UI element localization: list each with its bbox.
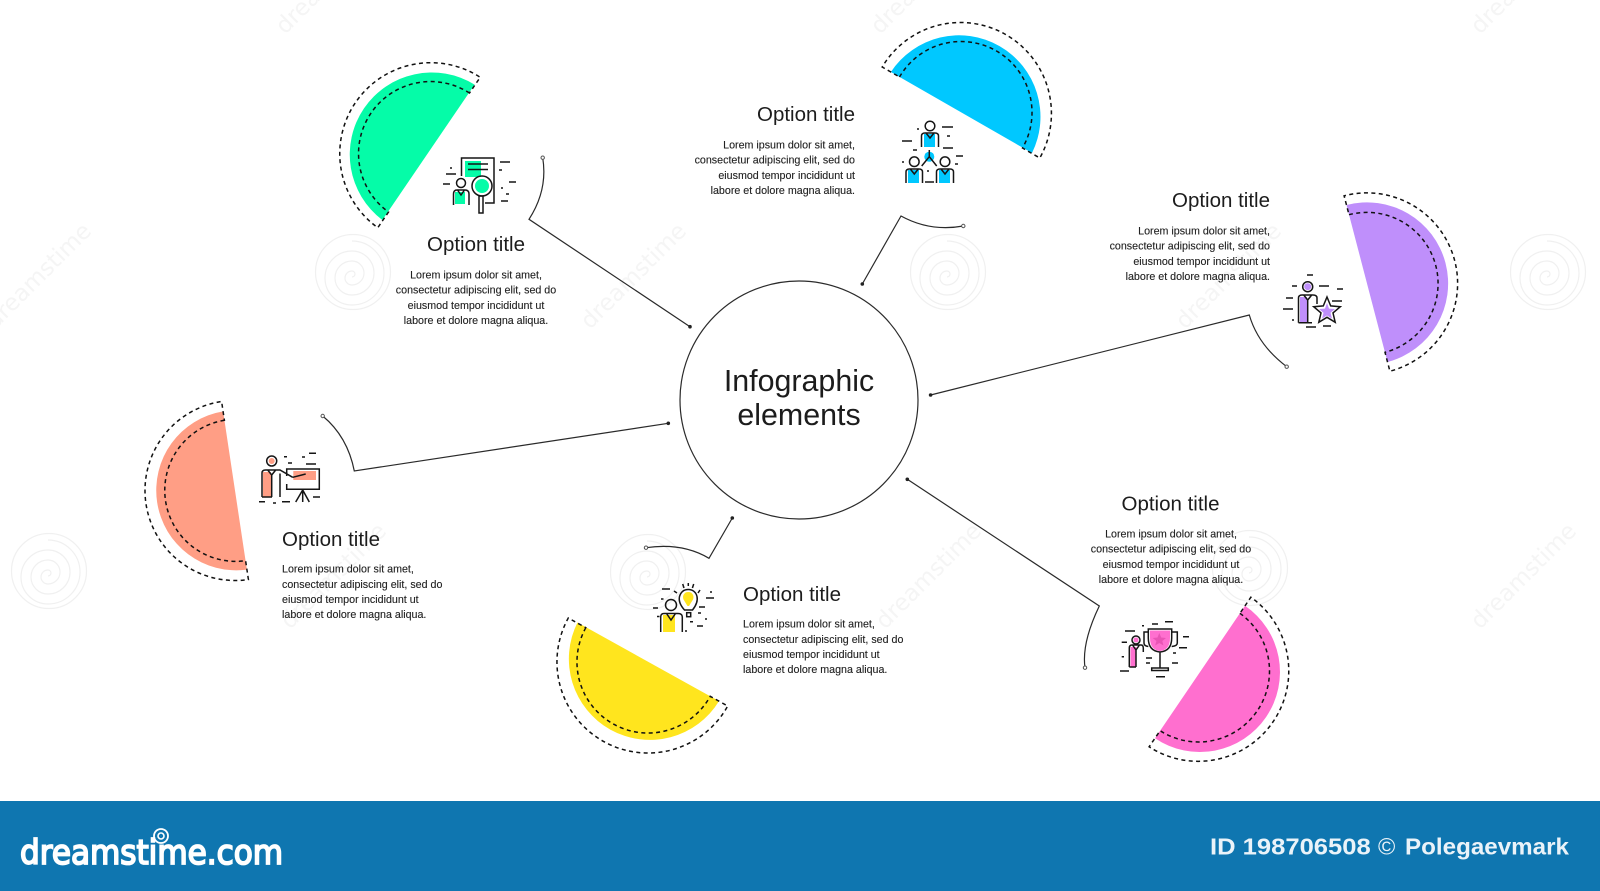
central circle — [680, 281, 918, 519]
orange connector — [321, 414, 670, 471]
green body: consectetur adipiscing elit, sed do — [396, 285, 556, 297]
panel: blue option — [695, 22, 1051, 286]
orange body: consectetur adipiscing elit, sed do — [282, 579, 442, 591]
logo spiral — [154, 829, 168, 843]
yellow body: consectetur adipiscing elit, sed do — [743, 634, 903, 646]
icon: person with trophy — [1120, 622, 1189, 677]
image credit: © — [1378, 833, 1395, 859]
panel: green option — [340, 63, 692, 329]
watermark layer: dreamstime — [576, 218, 692, 334]
watermark layer: dreamstime — [1466, 518, 1582, 634]
blue body: labore et dolore magna aliqua. — [711, 185, 855, 197]
yellow half disc — [569, 622, 719, 740]
yellow body: eiusmod tempor incididunt ut — [743, 649, 880, 661]
panel: pink option — [906, 478, 1289, 761]
pink body: eiusmod tempor incididunt ut — [1103, 559, 1239, 571]
yellow body: Lorem ipsum dolor sit amet, — [743, 619, 875, 631]
purple body: eiusmod tempor incididunt ut — [1133, 256, 1270, 268]
central title: Infographic — [724, 364, 874, 398]
blue half disc — [891, 35, 1040, 153]
watermark layer — [0, 0, 1585, 634]
pink body: Lorem ipsum dolor sit amet, — [1105, 528, 1237, 540]
green body: eiusmod tempor incididunt ut — [408, 300, 544, 312]
green half disc — [350, 73, 475, 220]
image credit: ID 198706508 — [1210, 833, 1371, 859]
watermark layer: dreamstime — [871, 518, 987, 634]
green body: labore et dolore magna aliqua. — [404, 315, 548, 327]
blue connector — [860, 216, 965, 286]
blue dashed outline — [882, 22, 1051, 158]
green title: Option title — [427, 233, 525, 256]
pink dashed outline — [1149, 597, 1289, 761]
icon: person with star — [1283, 275, 1343, 327]
pink connector — [906, 478, 1099, 669]
yellow dashed outline — [557, 618, 728, 753]
central title: elements — [737, 398, 861, 432]
orange body: eiusmod tempor incididunt ut — [282, 594, 419, 606]
image credit — [1210, 833, 1570, 859]
purple connector — [929, 315, 1288, 397]
panel: yellow option — [557, 516, 903, 753]
footer bar — [0, 801, 1600, 891]
green connector — [529, 156, 692, 329]
icon: document and magnifier — [443, 158, 516, 213]
pink title: Option title — [1122, 493, 1220, 516]
blue body: eiusmod tempor incididunt ut — [718, 170, 855, 182]
icon: presenter with board — [259, 453, 320, 503]
green body: Lorem ipsum dolor sit amet, — [410, 270, 542, 282]
icon: person with lightbulb — [653, 583, 714, 632]
watermark layer: dreamstime — [1171, 218, 1287, 334]
icon: team hierarchy — [902, 121, 963, 183]
panel: purple option — [929, 189, 1458, 397]
blue title: Option title — [757, 103, 855, 126]
purple body: Lorem ipsum dolor sit amet, — [1138, 226, 1270, 238]
orange title: Option title — [282, 528, 380, 551]
watermark layer: dreamstime — [276, 518, 392, 634]
panel: orange option — [145, 402, 670, 621]
logo wordmark: dreamstime.com — [20, 833, 283, 873]
yellow body: labore et dolore magna aliqua. — [743, 664, 887, 676]
orange body: Lorem ipsum dolor sit amet, — [282, 564, 414, 576]
purple half disc — [1346, 202, 1448, 362]
purple dashed outline — [1344, 193, 1458, 371]
pink half disc — [1155, 606, 1280, 752]
yellow title: Option title — [743, 583, 841, 606]
purple body: labore et dolore magna aliqua. — [1126, 271, 1270, 283]
pink body: consectetur adipiscing elit, sed do — [1091, 544, 1251, 556]
image credit: Polegaevmark — [1405, 833, 1570, 859]
yellow connector — [644, 516, 734, 558]
orange dashed outline — [145, 402, 248, 581]
purple body: consectetur adipiscing elit, sed do — [1110, 241, 1270, 253]
blue body: consectetur adipiscing elit, sed do — [695, 155, 855, 167]
orange half disc — [156, 411, 247, 570]
orange body: labore et dolore magna aliqua. — [282, 609, 426, 621]
pink body: labore et dolore magna aliqua. — [1099, 574, 1243, 586]
green dashed outline — [340, 63, 480, 228]
blue body: Lorem ipsum dolor sit amet, — [723, 140, 855, 152]
purple title: Option title — [1172, 189, 1270, 212]
